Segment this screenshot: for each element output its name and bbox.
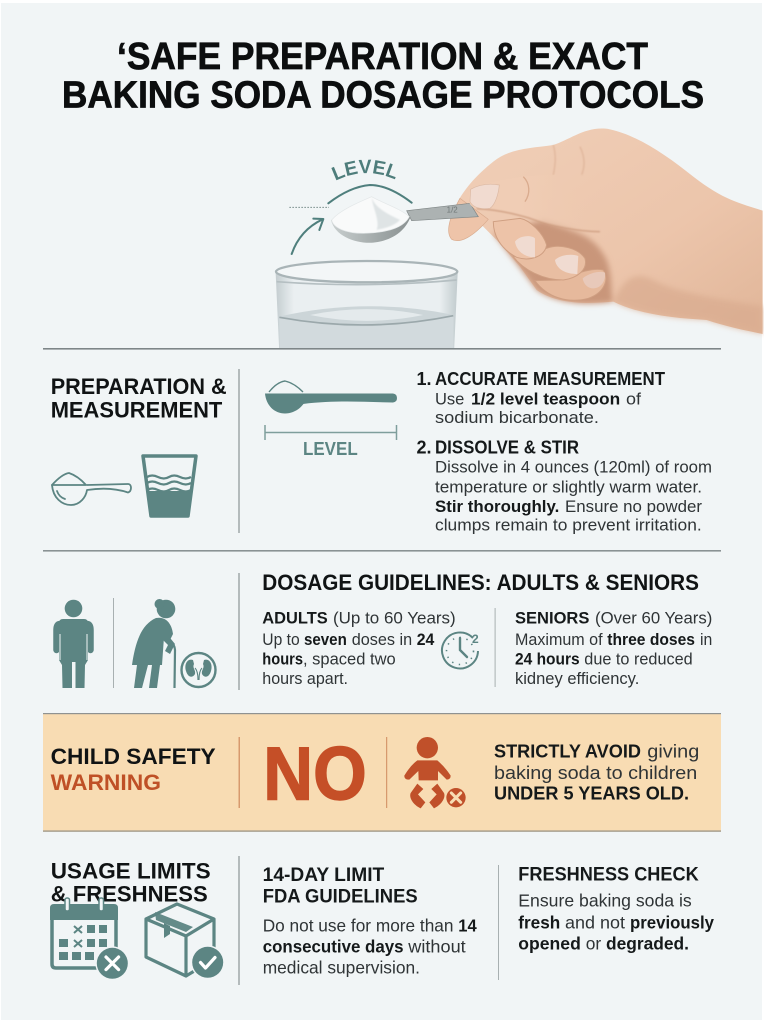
heading: usage limits: USAGE LIMITS	[51, 858, 211, 883]
text: 14-day limit: Do not use for more than	[263, 916, 458, 936]
text: adults: (Up to 60 Years)	[333, 609, 456, 627]
hero illustration: hand, spoon and glass: 1/2	[447, 206, 458, 215]
text: adults: hours apart.	[262, 670, 348, 688]
text: freshness check: or	[586, 933, 606, 953]
divider: preparation	[43, 550, 721, 552]
icon: senior with cane	[132, 599, 175, 688]
level dotted line	[289, 206, 329, 209]
step 1	[416, 369, 665, 427]
step 2: Dissolve in 4 ounces (120ml) of room	[435, 459, 712, 477]
text: seniors	[515, 609, 712, 688]
text: seniors: 24 hours	[515, 651, 584, 669]
divider: hero	[43, 348, 721, 350]
step 2: DISSOLVE & STIR	[435, 438, 579, 458]
text: adults: seven	[304, 631, 351, 649]
text: adults: 24	[417, 631, 435, 649]
icon: clock	[442, 632, 479, 668]
index finger	[449, 198, 488, 241]
step 2: clumps remain to prevent irritation.	[435, 517, 702, 535]
title: ‘SAFE PREPARATION & EXACT	[117, 36, 648, 78]
NO label: NO	[263, 731, 367, 815]
arrow	[292, 219, 323, 254]
spoon handle	[407, 203, 478, 221]
text: adults: doses in	[352, 631, 417, 649]
text: freshness check: degraded.	[606, 933, 689, 953]
panel: preparation and measurement	[51, 369, 712, 535]
glass of water	[276, 261, 458, 353]
text: 14-day limit: consecutive days	[263, 937, 408, 957]
icon: kidneys	[182, 653, 216, 687]
heading: preparation: PREPARATION &	[51, 374, 227, 399]
middle finger	[493, 218, 547, 259]
text: seniors: kidney efficiency.	[515, 670, 639, 688]
icon: baby with prohibition	[404, 737, 466, 808]
icon: glass of water	[143, 456, 196, 517]
text: freshness check	[518, 865, 714, 953]
text: freshness check: fresh	[518, 912, 565, 932]
hand back	[459, 129, 763, 334]
text: 14-day limit: medical supervision.	[263, 957, 420, 977]
heading: preparation: MEASUREMENT	[51, 397, 223, 422]
text: seniors: three doses	[607, 631, 699, 649]
step 2: 2.	[416, 438, 437, 458]
heading: dosage: DOSAGE GUIDELINES: ADULTS & SENIORS	[262, 570, 699, 595]
heading: child safety: CHILD SAFETY	[51, 744, 216, 769]
heading: usage limits: & FRESHNESS	[51, 882, 208, 907]
ring finger	[513, 246, 586, 280]
icon: level filled spoon	[265, 381, 397, 414]
text: freshness check: FRESHNESS CHECK	[518, 865, 699, 886]
step 2: temperature or slightly warm water.	[435, 478, 702, 496]
level arc label: LEVEL	[331, 160, 396, 180]
text: strictly avoid: giving	[647, 740, 699, 761]
step 2	[416, 438, 712, 535]
spoon bowl	[331, 217, 411, 243]
icon: adult	[56, 600, 90, 688]
level bracket	[265, 425, 396, 440]
text: seniors: in	[700, 631, 712, 649]
icon: calendar	[50, 898, 129, 980]
text: 14-day limit	[263, 865, 477, 977]
text: 14-day limit: 14-DAY LIMIT	[263, 865, 385, 886]
text: freshness check: previously	[630, 912, 714, 932]
little finger	[535, 269, 606, 300]
text: adults: , spaced two	[303, 650, 396, 668]
step 1: ACCURATE MEASUREMENT	[435, 369, 665, 389]
text: freshness check: Ensure baking soda is	[518, 891, 692, 911]
level curve	[328, 185, 412, 203]
text: strictly avoid: STRICTLY AVOID	[494, 740, 646, 761]
text: 14-day limit: FDA GUIDELINES	[263, 887, 418, 908]
panel: usage limits and freshness	[50, 856, 714, 985]
text: freshness check: opened	[518, 933, 586, 953]
text: freshness check: and not	[565, 912, 630, 932]
text: adults: hours	[262, 650, 303, 668]
title: BAKING SODA DOSAGE PROTOCOLS	[62, 74, 704, 116]
icon: box	[146, 904, 225, 979]
text: strictly avoid: baking soda to children	[494, 762, 697, 783]
text: adults	[262, 609, 456, 688]
text: seniors: SENIORS	[515, 609, 594, 627]
text: adults: ADULTS	[262, 609, 332, 627]
step 1: sodium bicarbonate.	[435, 409, 599, 427]
baking soda powder	[332, 197, 409, 233]
text: seniors: (Over 60 Years)	[595, 609, 712, 627]
text: seniors: due to reduced	[584, 651, 693, 669]
hero illustration: hand, spoon and glass	[274, 128, 764, 348]
level label: LEVEL	[303, 439, 358, 459]
icon: clock: 2	[472, 632, 479, 646]
text: 14-day limit: without	[407, 937, 466, 957]
heading: child safety: WARNING	[51, 770, 161, 795]
step 1: 1.	[416, 369, 437, 389]
step 1: of	[626, 390, 641, 408]
title	[62, 36, 704, 116]
step 2: Stir thoroughly.	[435, 498, 564, 516]
icon: outline spoon	[52, 473, 131, 505]
step 1: Use	[435, 390, 469, 408]
text: strictly avoid: UNDER 5 YEARS OLD.	[494, 782, 689, 803]
text: seniors: Maximum of	[515, 631, 607, 649]
step 1: 1/2 level teaspoon	[471, 390, 625, 408]
panel: dosage guidelines	[56, 570, 712, 690]
text: 14-day limit: 14	[458, 916, 477, 936]
panel: child safety warning	[43, 713, 721, 832]
step 2: Ensure no powder	[565, 498, 703, 516]
text: adults: Up to	[262, 631, 304, 649]
palm shading	[493, 220, 613, 304]
thumb	[468, 174, 607, 230]
